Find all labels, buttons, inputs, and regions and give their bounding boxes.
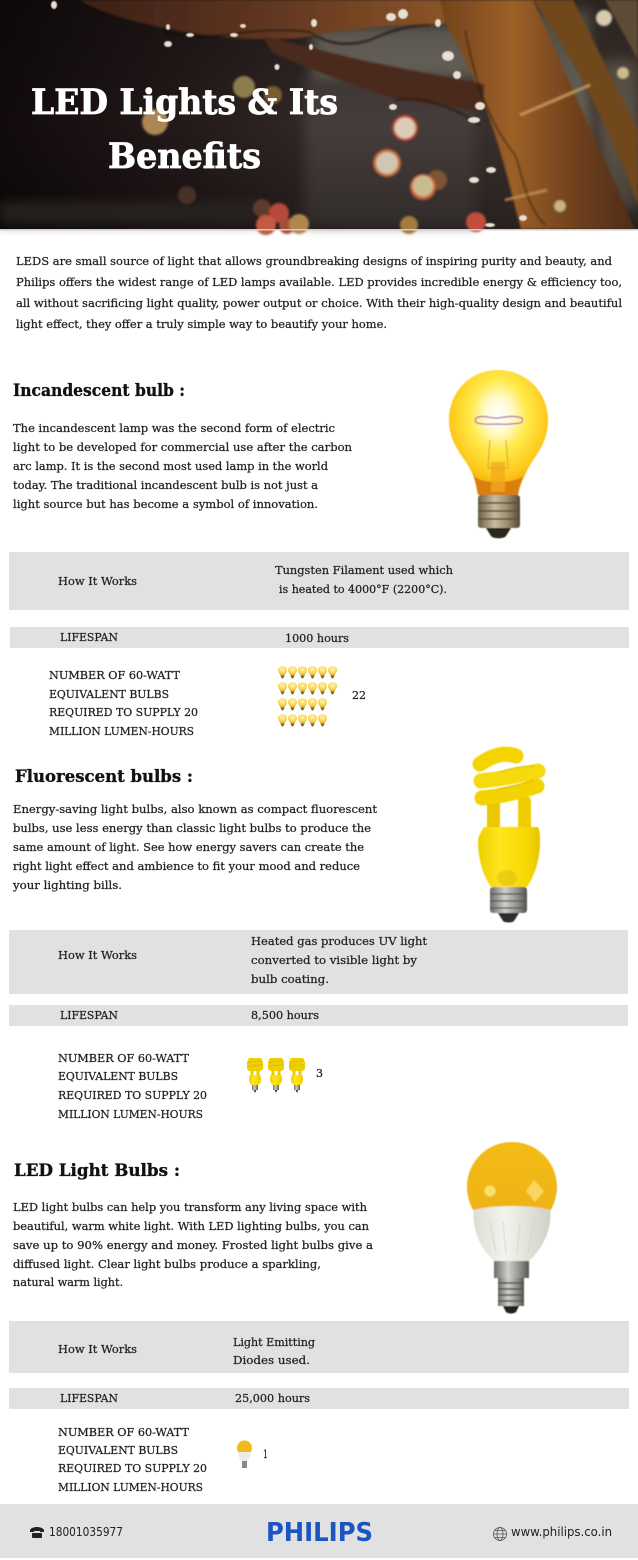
logo: Philips: PHILIPS bbox=[266, 1518, 373, 1548]
bulbs required label (incandescent): EQUIVALENT BULBS bbox=[49, 687, 169, 701]
bulbs required label (incandescent): MILLION LUMEN-HOURS bbox=[49, 724, 194, 738]
pictogram: 3 fluorescent bulbs bbox=[247, 1058, 305, 1093]
table row: lifespan (LED) bbox=[9, 1388, 629, 1409]
panel: LED light bulbs bbox=[13, 1142, 557, 1314]
LED description: natural warm light. bbox=[13, 1275, 123, 1289]
table row: how it works (incandescent) bbox=[9, 552, 629, 610]
LED description bbox=[13, 1200, 373, 1289]
bulbs required label (fluorescent): MILLION LUMEN-HOURS bbox=[58, 1107, 203, 1121]
table row: how it works (fluorescent): Heated gas produces UV light bbox=[251, 934, 427, 948]
table row: how it works (LED) bbox=[9, 1321, 629, 1373]
table row: lifespan (incandescent) bbox=[10, 627, 629, 648]
icon: incandescent bulb bbox=[449, 370, 548, 538]
website: www.philips.co.in bbox=[511, 1525, 612, 1539]
fluorescent description: bulbs, use less energy than classic light bulbs to produce the bbox=[13, 821, 371, 835]
intro paragraph: Philips offers the widest range of LED lamps available. LED provides incredible energy & efficiency too, bbox=[16, 275, 622, 289]
fluorescent description: same amount of light. See how energy savers can create the bbox=[13, 840, 364, 854]
table row: how it works (LED): Light Emitting bbox=[233, 1335, 316, 1349]
bulbs required label (LED): NUMBER OF 60-WATT bbox=[58, 1425, 189, 1439]
incandescent description: arc lamp. It is the second most used lamp in the world bbox=[13, 459, 329, 473]
LED description: LED light bulbs can help you transform any living space with bbox=[13, 1200, 368, 1214]
pictogram: 1 LED bulb bbox=[237, 1440, 252, 1468]
incandescent description: today. The traditional incandescent bulb is not just a bbox=[13, 478, 318, 492]
phone number: 18001035977 bbox=[49, 1525, 123, 1539]
title: Benefits bbox=[108, 136, 261, 177]
bulbs required label (LED) bbox=[58, 1425, 207, 1494]
table row: how it works (LED): How It Works bbox=[58, 1342, 137, 1356]
fluorescent description bbox=[12, 802, 377, 892]
table row: how it works (fluorescent): How It Works bbox=[58, 948, 137, 962]
panel: incandescent bulb bbox=[13, 370, 548, 538]
intro paragraph: light effect, they offer a truly simple way to beautify your home. bbox=[16, 317, 387, 331]
bulbs required label (fluorescent): EQUIVALENT BULBS bbox=[58, 1069, 178, 1083]
title bbox=[31, 82, 338, 177]
count: 3: 3 bbox=[316, 1066, 323, 1080]
heading: incandescent: Incandescent bulb : bbox=[13, 381, 185, 401]
fluorescent description: your lighting bills. bbox=[12, 878, 122, 892]
LED description: beautiful, warm white light. With LED lighting bulbs, you can bbox=[13, 1219, 370, 1233]
table row: how it works (incandescent): is heated to 4000°F (2200°C). bbox=[279, 582, 447, 596]
bulbs required label (fluorescent): REQUIRED TO SUPPLY 20 bbox=[58, 1088, 207, 1102]
incandescent description: light source but has become a symbol of innovation. bbox=[13, 497, 318, 511]
panel: fluorescent bulbs bbox=[12, 754, 540, 922]
table row: lifespan (incandescent): 1000 hours bbox=[285, 631, 349, 645]
icon: globe bbox=[494, 1528, 506, 1540]
table row: lifespan (incandescent): LIFESPAN bbox=[60, 630, 118, 644]
bulbs required label (incandescent): REQUIRED TO SUPPLY 20 bbox=[49, 705, 198, 719]
footer bbox=[0, 1504, 638, 1558]
bulbs required label (LED): REQUIRED TO SUPPLY 20 bbox=[58, 1461, 207, 1475]
bulbs required label (LED): EQUIVALENT BULBS bbox=[58, 1443, 178, 1457]
table row: lifespan (LED): 25,000 hours bbox=[235, 1391, 310, 1405]
intro paragraph: all without sacrificing light quality, power output or choice. With their high-quality design and beautiful bbox=[16, 296, 622, 310]
incandescent description bbox=[13, 421, 353, 511]
bulbs required label (fluorescent) bbox=[58, 1051, 207, 1121]
fluorescent description: right light effect and ambience to fit your mood and reduce bbox=[13, 859, 360, 873]
table row: lifespan (fluorescent): LIFESPAN bbox=[60, 1008, 118, 1022]
bulbs required label (incandescent) bbox=[49, 668, 198, 738]
bulbs required label (incandescent): NUMBER OF 60-WATT bbox=[49, 668, 180, 682]
pictogram: 22 incandescent bulbs bbox=[278, 666, 337, 727]
icon: telephone bbox=[30, 1527, 44, 1538]
count: 22: 22 bbox=[352, 688, 366, 702]
table row: how it works (fluorescent) bbox=[9, 930, 628, 994]
intro paragraph: LEDS are small source of light that allows groundbreaking designs of inspiring purity and beauty, and bbox=[16, 254, 613, 268]
incandescent description: light to be developed for commercial use after the carbon bbox=[13, 440, 353, 454]
bulbs required label (LED): MILLION LUMEN-HOURS bbox=[58, 1480, 203, 1494]
count: 1: 1 bbox=[263, 1447, 268, 1461]
table row: lifespan (fluorescent): 8,500 hours bbox=[251, 1008, 319, 1022]
table row: how it works (LED): Diodes used. bbox=[233, 1353, 310, 1367]
incandescent description: The incandescent lamp was the second form of electric bbox=[13, 421, 335, 435]
table row: how it works (fluorescent): converted to visible light by bbox=[251, 953, 418, 967]
table row: how it works (fluorescent): bulb coating. bbox=[251, 972, 329, 986]
icon: LED bulb bbox=[467, 1142, 557, 1314]
intro paragraph bbox=[16, 254, 622, 331]
bulbs required label (fluorescent): NUMBER OF 60-WATT bbox=[58, 1051, 189, 1065]
LED description: save up to 90% energy and money. Frosted light bulbs give a bbox=[13, 1238, 373, 1252]
heading: fluorescent: Fluorescent bulbs : bbox=[15, 767, 193, 787]
table row: how it works (incandescent): Tungsten Filament used which bbox=[275, 563, 454, 577]
title: LED Lights & Its bbox=[31, 82, 338, 123]
table row: lifespan (fluorescent) bbox=[9, 1005, 628, 1026]
hero banner bbox=[0, 0, 638, 235]
heading: LED: LED Light Bulbs : bbox=[14, 1161, 180, 1181]
fluorescent description: Energy-saving light bulbs, also known as compact fluorescent bbox=[13, 802, 377, 816]
table row: lifespan (LED): LIFESPAN bbox=[60, 1391, 118, 1405]
icon: fluorescent bulb bbox=[478, 754, 540, 922]
LED description: diffused light. Clear light bulbs produce a sparkling, bbox=[13, 1257, 321, 1271]
table row: how it works (incandescent): How It Works bbox=[58, 574, 137, 588]
